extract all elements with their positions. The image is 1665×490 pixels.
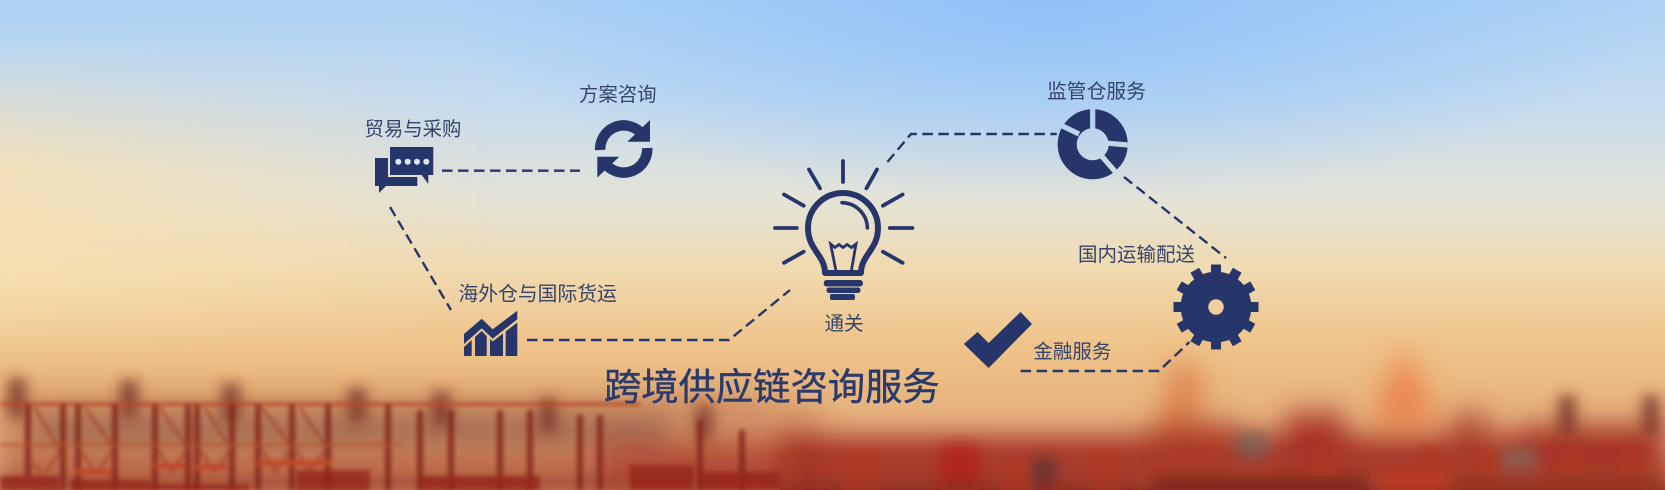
label: financial service: 金融服务 (1033, 341, 1111, 363)
connector: domestic delivery to finance (1021, 342, 1189, 371)
icon: gear (1174, 264, 1258, 350)
label: customs clearance: 通关 (824, 313, 864, 335)
connector: trade to consulting (442, 169, 580, 172)
connector: trade to overseas warehouse (390, 207, 451, 310)
label: domestic transport and delivery: 国内运输配送 (1078, 244, 1195, 266)
icon: rising bar chart (464, 311, 517, 356)
label: overseas warehouse and international freight: 海外仓与国际货运 (458, 284, 617, 306)
icon: chat bubbles (375, 147, 433, 193)
icon: segmented donut (1067, 119, 1118, 170)
icon: check mark (964, 312, 1032, 368)
icon: refresh arrows (597, 120, 650, 178)
connector: customs to bonded warehouse (887, 134, 1057, 162)
connector: overseas warehouse to customs (527, 290, 790, 340)
label: bonded warehouse service: 监管仓服务 (1047, 81, 1146, 103)
icon: light bulb (775, 161, 912, 300)
crane steelwork (0, 404, 742, 490)
title: 跨境供应链咨询服务 (604, 366, 940, 408)
label: solution consulting: 方案咨询 (579, 84, 657, 106)
label: trade and procurement: 贸易与采购 (364, 118, 461, 140)
connector: bonded warehouse to domestic delivery (1124, 177, 1226, 258)
